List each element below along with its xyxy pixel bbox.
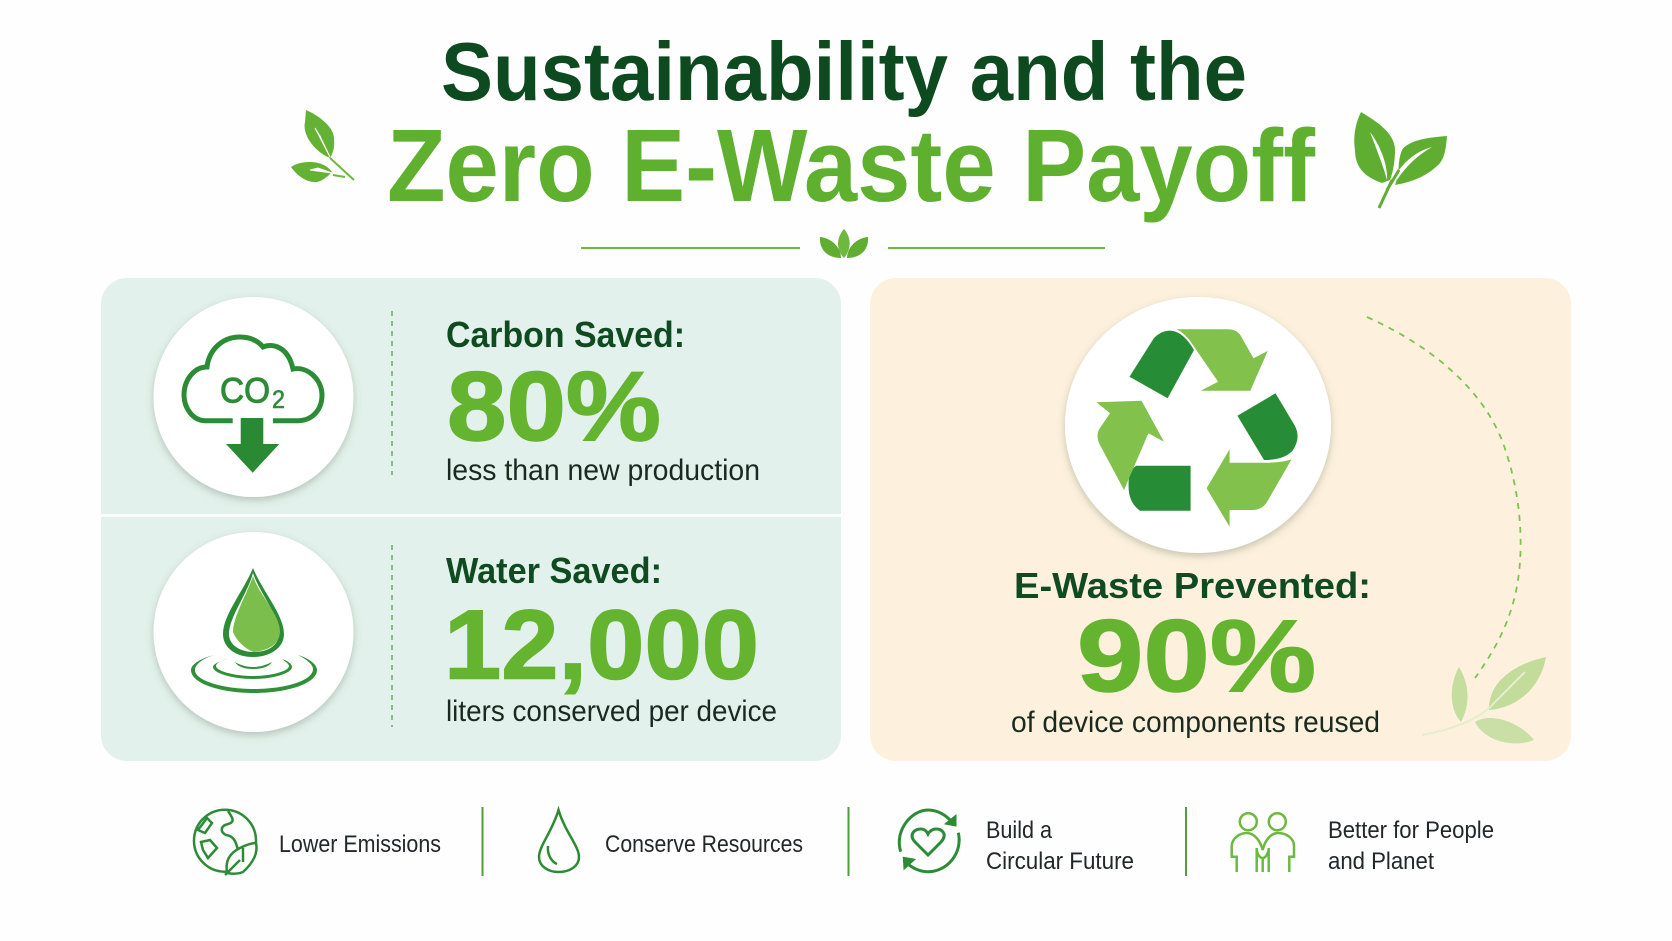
e-waste text	[1011, 565, 1380, 739]
recycle icon circle	[1065, 297, 1331, 553]
e-waste text: E-Waste Prevented:	[1014, 565, 1371, 606]
carbon icon circle: 2	[272, 386, 285, 414]
better for people label: Better for People	[1328, 817, 1494, 844]
better for people label	[1328, 817, 1494, 875]
title divider with leaf	[581, 229, 1105, 258]
dashed arc	[1367, 317, 1521, 678]
icon: left title leaves	[291, 110, 354, 182]
better for people label: and Planet	[1328, 848, 1434, 875]
title: Zero E-Waste Payoff	[387, 108, 1316, 223]
icon: circular heart	[899, 810, 959, 872]
water saved text: liters conserved per device	[446, 695, 777, 728]
icon: globe with leaf	[194, 810, 256, 875]
icon: faded leaves	[1422, 657, 1546, 743]
circular future label	[986, 817, 1134, 875]
icon: two people	[1232, 813, 1294, 872]
footer benefits row	[194, 807, 1494, 876]
water icon circle	[154, 532, 354, 732]
carbon saved text	[446, 314, 760, 487]
water saved text: Water Saved:	[446, 550, 662, 591]
water saved text	[444, 550, 777, 728]
carbon saved text: Carbon Saved:	[446, 314, 685, 355]
carbon saved text: less than new production	[446, 454, 760, 487]
water saved text: 12,000	[444, 590, 759, 700]
title	[387, 25, 1316, 223]
panel: carbon and water	[101, 278, 841, 761]
icon: right title leaves	[1354, 112, 1447, 208]
conserve resources label: Conserve Resources	[605, 831, 803, 858]
carbon saved text: 80%	[447, 351, 661, 461]
title: Sustainability and the	[441, 25, 1247, 118]
carbon icon circle	[154, 297, 354, 497]
circular future label: Build a	[986, 817, 1053, 844]
icon: outline drop	[539, 810, 579, 872]
lower emissions label: Lower Emissions	[279, 831, 441, 858]
panel: e-waste prevented	[870, 278, 1571, 761]
e-waste text: of device components reused	[1011, 706, 1380, 739]
carbon icon circle: CO	[220, 372, 270, 410]
e-waste text: 90%	[1077, 599, 1316, 713]
circular future label: Circular Future	[986, 848, 1134, 875]
